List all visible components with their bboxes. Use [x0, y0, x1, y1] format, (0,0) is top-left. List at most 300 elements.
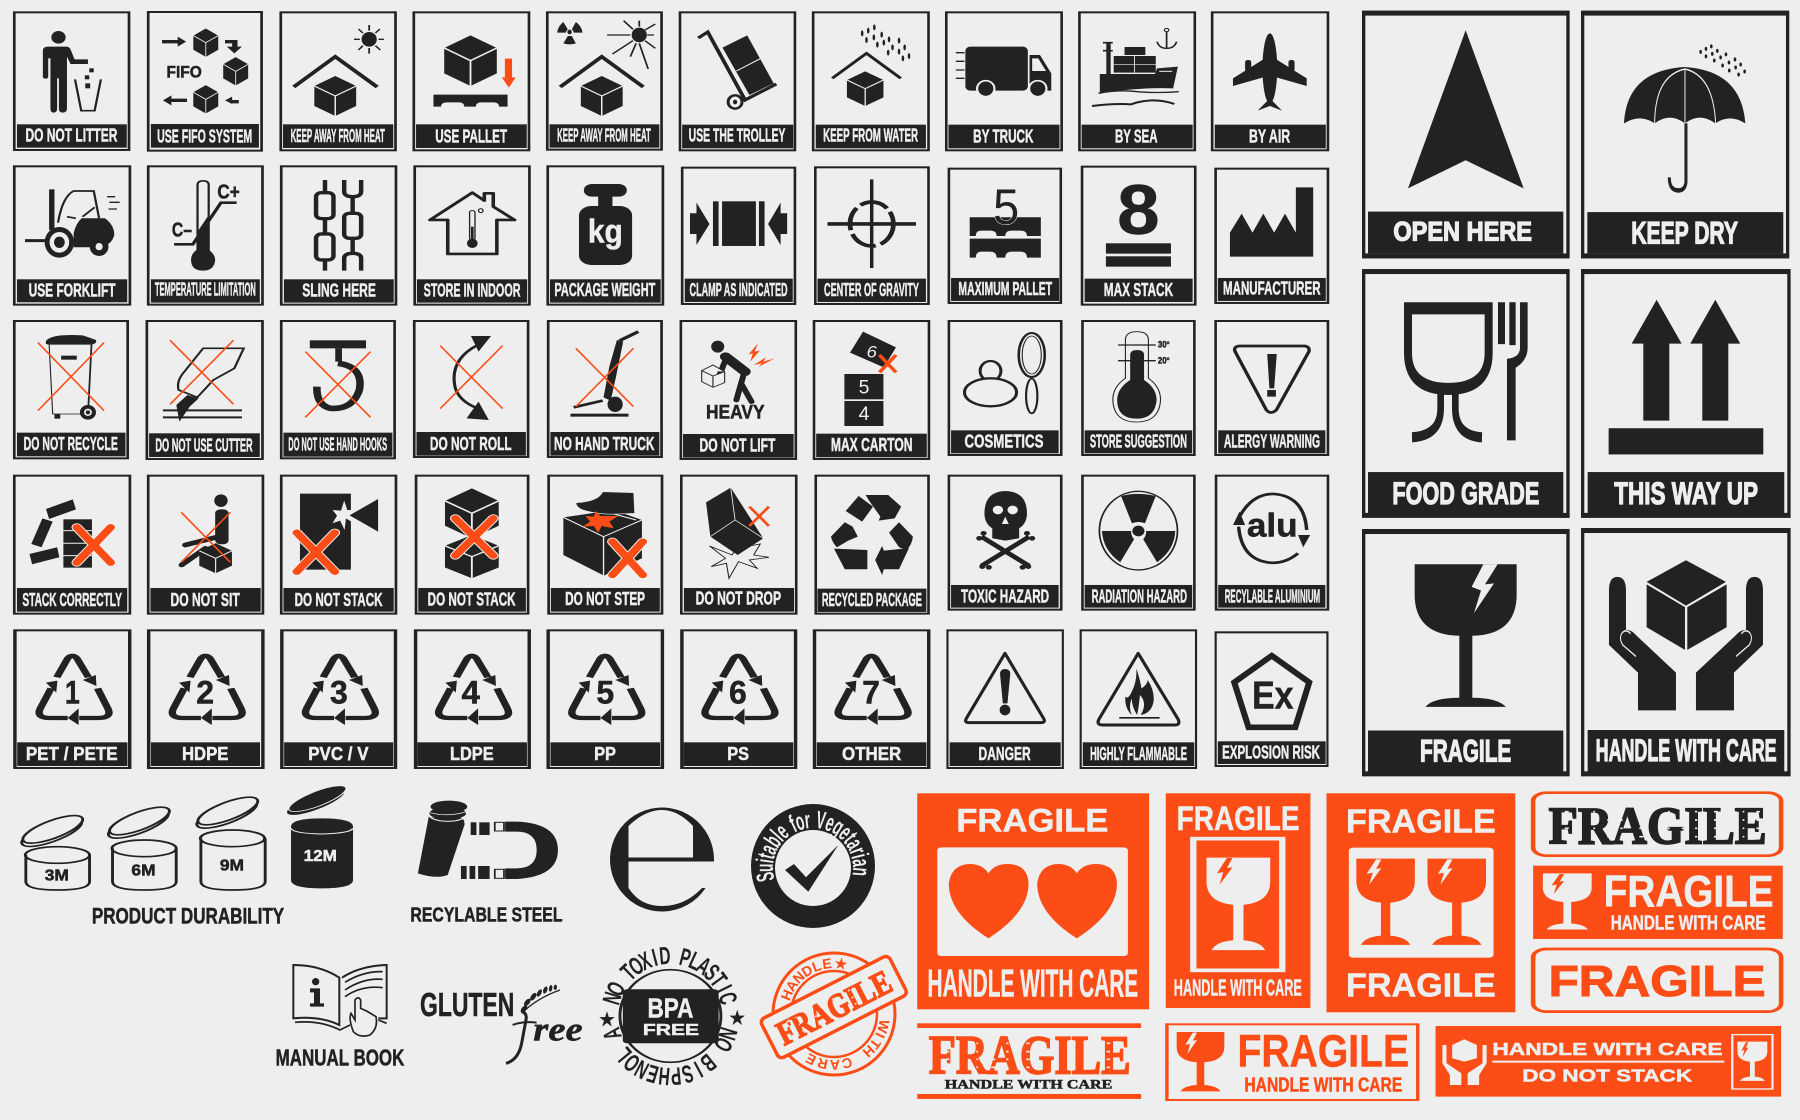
- icon: estimated sign e-mark: [610, 808, 714, 912]
- icon: crossed wheelie bin: [38, 335, 104, 420]
- group: product durability jars: [15, 782, 353, 928]
- stamp: handle with care fragile: D: [798, 961, 816, 980]
- text: no toxid plastic ring: X: [635, 947, 656, 976]
- icon: thermometer 20-30: 20°: [1158, 356, 1170, 366]
- stamp: handle with care fragile: H: [777, 987, 796, 1003]
- icon: gluten free: GLUTEN: [420, 987, 514, 1024]
- text: suitable for vegetarian ring: f: [785, 811, 801, 838]
- panel: label grid rows 3-4, columns 6-10: RADIATION HAZARD: [1092, 586, 1187, 607]
- icon: ex pentagon: Ex: [1252, 673, 1294, 717]
- icon: aluminium loop: alu: [1247, 507, 1298, 544]
- icon: recycling arrows: [831, 495, 913, 575]
- label: orange outlined fragile: [1533, 949, 1781, 1012]
- label: OTHER: [842, 744, 901, 764]
- icon: person lifting heavy box: HEAVY: [706, 401, 765, 423]
- text: suitable for vegetarian ring: g: [827, 814, 849, 841]
- icon: crossed hook: [305, 340, 371, 417]
- icon: radiation: [1099, 491, 1177, 570]
- text: no toxid plastic ring: L: [685, 947, 705, 976]
- text: no bisphenol a ring: H: [657, 1061, 671, 1090]
- stamp: handle with care fragile: H: [860, 1042, 878, 1061]
- stamp: handle with care fragile: I: [872, 1030, 888, 1041]
- card: explosion risk: [1216, 632, 1327, 766]
- panel: label grid rows 3-4, columns 1-5: STACK CORRECTLY: [22, 589, 122, 610]
- icon: trolley: [698, 32, 776, 109]
- stamp: handle with care fragile: L: [810, 957, 824, 975]
- icon: factory: [1230, 187, 1313, 257]
- card: stack correctly: [14, 476, 130, 614]
- card: keep away from heat: [281, 12, 396, 150]
- label: [1587, 212, 1783, 253]
- icon: crossed hand truck: [570, 332, 638, 417]
- text: PACKAGE WEIGHT: [554, 279, 655, 300]
- label: HANDLE WITH CARE: [1596, 733, 1777, 768]
- card: do not lift: [681, 321, 796, 459]
- panel: label grid rows 1-2, columns 1-5: STORE IN INDOOR: [424, 280, 521, 301]
- text: suitable for vegetarian ring: r: [803, 807, 812, 835]
- panel: label grid rows 3-4, columns 6-10: RECYCLED PACKAGE: [822, 590, 922, 610]
- text: no bisphenol a ring: L: [610, 1042, 638, 1067]
- icon: 3M jar: 3M: [45, 866, 69, 884]
- label: handle with care do not stack: HANDLE WITH CARE: [1492, 1040, 1723, 1059]
- card: maximum pallet: [949, 169, 1061, 303]
- text: manual book: MANUAL BOOK: [276, 1045, 405, 1071]
- panel: label grid rows 1-2, columns 6-10: USE THE TROLLEY: [689, 125, 785, 146]
- stamp: handle with care fragile: A: [830, 1057, 840, 1073]
- card: do not sit: [148, 476, 263, 614]
- stamp: handle with care fragile: [760, 953, 908, 1075]
- panel: label grid rows 1-2, columns 6-10: CLAMP AS INDICATED: [690, 280, 788, 300]
- card: keep away from heat (radiation): [547, 12, 662, 150]
- icon: gluten free: [420, 985, 583, 1063]
- card: 3 pvc: [282, 630, 395, 768]
- icon: forklift: [25, 189, 120, 258]
- label: framed fragile glass: FRAGILE: [1238, 1025, 1409, 1077]
- card: store suggestion: [1082, 321, 1194, 455]
- text: suitable for vegetarian ring: r: [844, 844, 871, 859]
- icon: recycle 3: 3: [330, 673, 348, 710]
- icon: box on pallet: [433, 35, 516, 107]
- icon: ship and anchor: [1092, 28, 1179, 106]
- label: PVC / V: [308, 744, 369, 764]
- icon: flame triangle: [1098, 653, 1179, 725]
- card: recylable aluminium: [1216, 476, 1328, 610]
- icon: clamp: [690, 201, 787, 246]
- label: FOOD GRADE: [1392, 475, 1539, 511]
- label: HDPE: [182, 744, 228, 764]
- panel: orange fragile labels: FRAGILE: [929, 1024, 1131, 1085]
- card: clamp as indicated: [682, 168, 795, 304]
- icon: recycle 1: 1: [65, 673, 80, 710]
- label: KEEP DRY: [1631, 215, 1738, 250]
- text: suitable for vegetarian ring: i: [752, 857, 780, 865]
- icon: 9M jar: [190, 792, 265, 890]
- text: no toxid plastic ring: T: [616, 959, 642, 986]
- icon: bpa free center: BPA: [647, 993, 693, 1024]
- text: no toxid plastic ring: [598, 942, 742, 1008]
- text: no bisphenol a ring: P: [669, 1061, 682, 1090]
- icon: plane: [1233, 33, 1307, 111]
- card: use pallet: [414, 12, 529, 150]
- text: suitable for vegetarian ring: n: [846, 866, 874, 877]
- label: DO NOT DROP: [696, 588, 781, 609]
- label: PET / PETE: [26, 744, 118, 764]
- panel: label grid rows 3-4, columns 1-5: DO NOT USE CUTTER: [155, 434, 253, 456]
- stamp: handle with care fragile: ★: [834, 955, 849, 972]
- text: suitable for vegetarian ring: b: [760, 830, 787, 853]
- panel: label grid rows 3-4, columns 6-10: [681, 321, 1328, 614]
- stamp: handle with care fragile: FRAGILE: [771, 964, 898, 1053]
- stamp: handle with care fragile: T: [866, 1036, 884, 1052]
- label: SLING HERE: [302, 279, 376, 301]
- icon: 12M jar: 12M: [304, 847, 337, 865]
- icon: pallets with 5: 5: [993, 179, 1019, 235]
- icon: crosshair: [827, 179, 916, 268]
- card: use the trolley: [680, 12, 795, 150]
- card: max stack: [1082, 167, 1195, 305]
- card: 2 hdpe: [149, 630, 263, 768]
- icon: two glasses: [1356, 859, 1486, 945]
- label: PS: [727, 744, 749, 764]
- panel: label grid rows 3-4, columns 1-5: [14, 321, 662, 614]
- label: FRAGILE: [1420, 733, 1511, 769]
- panel: label grid rows 1-2, columns 1-5: KEEP AWAY FROM HEAT: [291, 125, 385, 146]
- icon: recycle 7: 7: [862, 673, 880, 710]
- label: BY AIR: [1249, 126, 1290, 147]
- text: suitable for vegetarian ring: o: [792, 808, 808, 837]
- panel: lower-left symbols: RECYLABLE STEEL: [410, 904, 563, 927]
- icon: recycle 6: 6: [729, 673, 747, 710]
- label: [1368, 212, 1563, 253]
- icon: hands and box: [1442, 1039, 1487, 1085]
- icon: house and sun: [294, 25, 384, 116]
- text: suitable for vegetarian ring: e: [833, 820, 857, 846]
- card: food grade: [1364, 272, 1568, 515]
- text: suitable for vegetarian ring: u: [752, 863, 779, 872]
- icon: bpa free center: FREE: [643, 1021, 699, 1039]
- panel: orange fragile labels: HANDLE WITH CARE: [1244, 1074, 1402, 1097]
- text: no bisphenol a ring: S: [678, 1059, 696, 1088]
- icon: 8 stack: 8: [1117, 171, 1160, 249]
- icon: recycle 2: 2: [196, 673, 214, 710]
- panel: orange fragile labels: HANDLE WITH CARE: [928, 962, 1138, 1005]
- icon: crossed impact: [297, 494, 378, 572]
- text: no bisphenol a ring: N: [631, 1054, 653, 1084]
- text: no toxid plastic ring: S: [698, 959, 725, 986]
- text: suitable for vegetarian ring: V: [814, 807, 828, 835]
- panel: label grid rows 1-2, columns 1-5: [14, 12, 663, 305]
- card: do not use cutter: [147, 321, 262, 459]
- icon: two arrows up: [1609, 300, 1763, 454]
- card: radiation hazard: [1082, 476, 1194, 610]
- group: product durability jars: PRODUCT DURABILITY: [92, 903, 284, 928]
- label: MAX STACK: [1104, 280, 1173, 300]
- card: cosmetics: [949, 321, 1061, 455]
- label: DANGER: [979, 745, 1031, 765]
- card: handle with care: [1583, 531, 1789, 774]
- label: THIS WAY UP: [1614, 475, 1758, 511]
- icon: thermometer limits: C+: [217, 181, 240, 203]
- card: recycled package: [816, 476, 929, 614]
- icon: crossed person on box: [181, 494, 232, 573]
- text: no toxid plastic ring: O: [602, 978, 632, 1001]
- card: keep from water: [813, 12, 929, 150]
- card: temperature limitation: [148, 166, 262, 305]
- text: no bisphenol a ring: B: [695, 1048, 721, 1077]
- icon: skull and crossbones: [976, 491, 1035, 570]
- icon: recyclable steel: [418, 801, 558, 879]
- card: 4 ldpe: [416, 630, 529, 768]
- icon: thermometer 20-30: [1113, 332, 1170, 422]
- text: no toxid plastic ring: P: [677, 943, 694, 973]
- label: fragile hearts: FRAGILE: [956, 802, 1108, 839]
- icon: gluten free: ree: [533, 1012, 583, 1049]
- panel: label grid rows 1-2, columns 6-10: [680, 12, 1328, 305]
- text: suitable for vegetarian ring: e: [771, 819, 794, 845]
- card: use forklift: [14, 166, 130, 305]
- text: no bisphenol a ring: E: [644, 1059, 662, 1088]
- label: USE PALLET: [435, 126, 507, 147]
- card: package weight: [548, 166, 663, 305]
- card: use fifo system: [148, 12, 262, 151]
- text: suitable for vegetarian ring: i: [845, 851, 873, 861]
- stamp: handle with care fragile: N: [789, 968, 808, 987]
- icon: bpa free center: ★: [600, 1010, 614, 1029]
- card: do not stack (impact): [281, 476, 396, 614]
- text: suitable for vegetarian ring: S: [752, 870, 781, 884]
- icon: thermometer 20-30: 30°: [1158, 340, 1170, 350]
- icon: open here arrow: [1408, 30, 1524, 188]
- icon: house, sun and radiation: [557, 21, 655, 116]
- stamp: handle with care fragile: E: [803, 1050, 819, 1069]
- card: by truck: [946, 12, 1062, 150]
- icon: 9M jar: 9M: [220, 856, 244, 874]
- text: no bisphenol a ring: I: [690, 1056, 707, 1082]
- card: 7 other: [815, 630, 929, 768]
- label: EXPLOSION RISK: [1222, 743, 1320, 763]
- stamp: handle with care fragile: C: [840, 1054, 854, 1072]
- card: max carton: [814, 321, 929, 459]
- label: [1368, 472, 1563, 513]
- label: BY SEA: [1115, 126, 1158, 147]
- card: 5 pp: [548, 630, 662, 768]
- card: by air: [1212, 12, 1328, 150]
- card: sling here: [281, 166, 396, 305]
- icon: carton stack: [844, 332, 896, 426]
- text: no bisphenol a ring: [598, 1024, 742, 1090]
- panel: orange fragile labels: HANDLE WITH CARE: [1174, 975, 1302, 1001]
- label: fragile two glasses: FRAGILE: [1346, 967, 1496, 1004]
- text: no bisphenol a ring: A: [598, 1024, 628, 1043]
- card: 6 ps: [682, 630, 796, 768]
- icon: carton stack: 5: [859, 376, 870, 398]
- text: suitable for vegetarian ring: a: [846, 857, 874, 869]
- card: toxic hazard: [949, 476, 1061, 610]
- label: HIGHLY FLAMMABLE: [1090, 745, 1187, 765]
- card: open here: [1364, 13, 1568, 256]
- label: DO NOT STACK: [428, 588, 516, 610]
- stamp: handle with care fragile: W: [874, 1018, 893, 1035]
- icon: warning triangle: [1235, 346, 1309, 412]
- card: manufacturer: [1216, 169, 1328, 303]
- label: [1368, 731, 1563, 772]
- text: no toxid plastic ring: I: [710, 981, 737, 997]
- icon: broken glass: [1415, 564, 1517, 707]
- icon: truck: [956, 47, 1051, 97]
- card: this way up: [1583, 272, 1789, 515]
- icon: recycle 5: 5: [596, 673, 614, 710]
- panel: label grid rows 1-2, columns 6-10: MAXIMUM PALLET: [958, 279, 1052, 299]
- card: by sea: [1079, 12, 1195, 150]
- card: do not litter: [14, 12, 129, 150]
- label: OPEN HERE: [1393, 216, 1532, 246]
- label: MAX CARTON: [831, 435, 912, 455]
- panel: large handling labels: [1364, 13, 1789, 774]
- card: alergy warning: [1216, 321, 1328, 455]
- icon: carton stack: 4: [859, 403, 870, 424]
- panel: orange fragile labels: [917, 793, 1783, 1100]
- stamp: handle with care fragile: R: [816, 1055, 829, 1073]
- text: no toxid plastic ring: O: [624, 952, 649, 981]
- icon: kg weight: kg: [588, 213, 623, 250]
- card: fragile: [1364, 532, 1568, 774]
- icon: thermometer limits: [172, 180, 240, 271]
- text: suitable for vegetarian ring: a: [755, 840, 784, 858]
- card: do not use hand hooks: [281, 321, 395, 458]
- icon: warning triangle: [966, 653, 1044, 723]
- label: DO NOT STEP: [565, 588, 645, 609]
- card: highly flammable: [1081, 630, 1196, 768]
- icon: crossed boot on box: [563, 492, 643, 576]
- icon: falling stack: [29, 499, 111, 568]
- icon: house in rain: [832, 24, 910, 106]
- text: no toxid plastic ring: C: [712, 989, 742, 1008]
- text: no toxid plastic ring: N: [598, 989, 628, 1008]
- icon: crossed roll arrows: [440, 336, 503, 420]
- icon: person littering: [43, 31, 101, 113]
- stamp: handle with care fragile: A: [782, 977, 801, 994]
- text: no bisphenol a ring: O: [619, 1048, 646, 1077]
- label: PP: [594, 744, 616, 764]
- label: USE FORKLIFT: [29, 279, 116, 301]
- card: do not stack (boxes): [416, 476, 528, 614]
- label: COSMETICS: [965, 431, 1043, 452]
- label: LDPE: [450, 744, 494, 764]
- text: no toxid plastic ring: T: [704, 968, 732, 993]
- label: NO HAND TRUCK: [554, 433, 655, 454]
- label: MANUFACTURER: [1223, 278, 1321, 299]
- label: DO NOT SIT: [171, 589, 240, 610]
- icon: house with thermometer: [430, 193, 515, 254]
- text: RECYLABLE ALUMINIUM: [1225, 586, 1320, 607]
- label: handle with care do not stack: DO NOT STACK: [1522, 1067, 1692, 1086]
- card: danger: [947, 630, 1063, 768]
- label: TOXIC HAZARD: [961, 586, 1049, 607]
- label: DO NOT ROLL: [430, 433, 512, 454]
- text: no bisphenol a ring: N: [712, 1024, 742, 1043]
- panel: label grid rows 3-4, columns 1-5: DO NOT RECYCLE: [24, 433, 118, 454]
- icon: vegetarian ring: [751, 804, 875, 928]
- icon: glass: [1207, 858, 1270, 950]
- card: do not step: [549, 476, 662, 614]
- stamp: handle with care fragile: E: [821, 955, 833, 972]
- card: no hand truck: [548, 321, 662, 457]
- text: suitable for vegetarian ring: t: [753, 850, 781, 862]
- label: handle with care do not stack: [1436, 1026, 1781, 1097]
- label: framed fragile glass: [1167, 1024, 1418, 1100]
- panel: label grid rows 1-2, columns 6-10: CENTER OF GRAVITY: [824, 280, 919, 300]
- text: KEEP AWAY FROM HEAT: [557, 124, 651, 146]
- icon: glass and fork: [1408, 302, 1528, 440]
- card: do not drop: [681, 476, 796, 614]
- panel: label grid rows 1-2, columns 1-5: USE FIFO SYSTEM: [157, 126, 252, 147]
- text: no toxid plastic ring: A: [691, 952, 716, 981]
- icon: 12M jar: [281, 782, 353, 888]
- label: DO NOT LIFT: [700, 435, 775, 456]
- text: suitable for vegetarian ring: e: [821, 810, 838, 838]
- icon: hands holding box: [1609, 560, 1763, 710]
- card: 1 pet/pete: [15, 630, 130, 768]
- label: fragile two glasses: FRAGILE: [1346, 803, 1496, 839]
- icon: thermometer limits: C–: [172, 219, 192, 242]
- label: fragile glass banner: [1533, 866, 1783, 939]
- card: center of gravity: [815, 167, 929, 304]
- label: DO NOT STACK: [295, 589, 383, 610]
- text: no toxid plastic ring: I: [649, 944, 660, 972]
- card: store in indoor: [415, 166, 529, 305]
- label: BY TRUCK: [973, 126, 1034, 147]
- panel: label grid rows 3-4, columns 6-10: STORE SUGGESTION: [1090, 431, 1187, 452]
- card: do not recycle: [14, 321, 128, 458]
- panel: hazard codes row: [947, 630, 1327, 768]
- panel: label grid rows 3-4, columns 1-5: DO NOT USE HAND HOOKS: [288, 434, 387, 455]
- icon: recycle 4: 4: [461, 673, 480, 710]
- icon: umbrella in rain: [1624, 44, 1746, 190]
- label: [1588, 472, 1784, 513]
- label: DO NOT LITTER: [25, 125, 118, 146]
- label: fragile framed glass: FRAGILE: [1177, 799, 1300, 838]
- icon: manual book: [293, 965, 387, 1036]
- icon: crossed cutter: [163, 340, 244, 422]
- icon: 6M jar: 6M: [131, 861, 156, 879]
- icon: carton stack: 6: [866, 344, 877, 362]
- icon: bpa free center: [600, 970, 744, 1062]
- text: suitable for vegetarian ring: t: [838, 828, 862, 849]
- label: fragile framed glass: [1166, 793, 1310, 1008]
- panel: label grid rows 1-2, columns 1-5: TEMPERATURE LIMITATION: [155, 279, 256, 300]
- icon: compact and mirror: [965, 333, 1045, 413]
- card: keep dry: [1583, 13, 1788, 256]
- text: suitable for vegetarian ring: l: [766, 826, 789, 847]
- text: no bisphenol a ring: O: [708, 1032, 738, 1056]
- text: no toxid plastic ring: D: [658, 942, 672, 971]
- text: ALERGY WARNING: [1224, 431, 1320, 452]
- label: fragile two glasses: [1326, 793, 1515, 1012]
- text: suitable for vegetarian ring: a: [840, 834, 868, 855]
- label: fragile hearts: [917, 793, 1149, 1009]
- card: do not roll: [414, 321, 528, 457]
- text: suitable for vegetarian ring: [752, 807, 874, 884]
- label: stencil fragile with bars: HANDLE WITH CARE: [945, 1077, 1112, 1091]
- label: stencil fragile with bars: [917, 1023, 1141, 1099]
- panel: lower-left symbols: [15, 782, 744, 1062]
- icon: crossed stacked boxes: [445, 488, 499, 578]
- icon: bpa free center: ★: [730, 1008, 744, 1027]
- panel: recycling codes row: [15, 630, 929, 768]
- icon: chains: [316, 180, 361, 271]
- icon: two hearts: [949, 864, 1117, 938]
- icon: 6M jar: [101, 802, 176, 890]
